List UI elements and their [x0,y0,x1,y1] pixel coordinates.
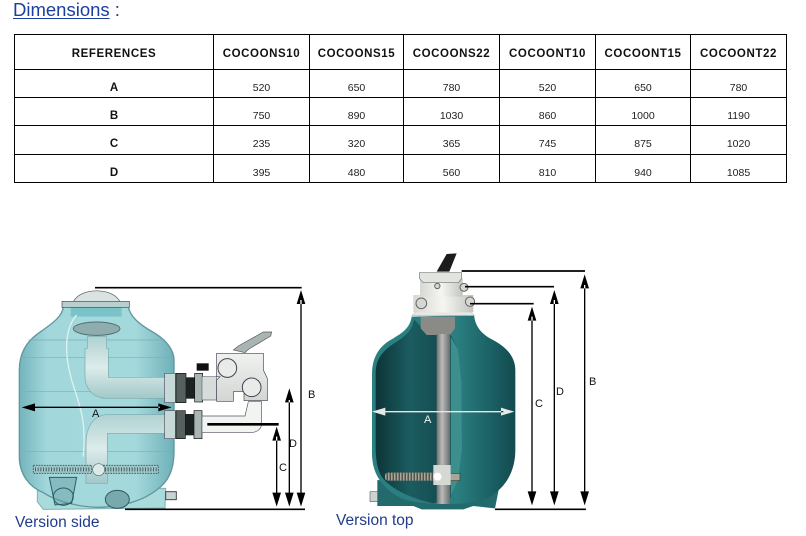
tank outer [372,315,515,504]
line top C [207,420,279,428]
drain outlet [105,490,129,508]
table header row: COCOONS15 [318,48,395,60]
label D top: D [556,386,564,398]
row C: 320 [348,138,365,150]
label C side: C [279,462,287,474]
row B: 1030 [440,110,463,122]
arrow C [528,307,536,505]
central pipe [437,334,450,504]
label C top: C [535,398,543,410]
diffuser [73,322,120,335]
row A [110,82,747,94]
row A: 780 [730,82,747,94]
arrow D [550,290,559,505]
valve flange [412,311,475,316]
valve handle [437,253,457,272]
line bottom [495,507,586,512]
row D: 940 [634,166,652,178]
lid flange [62,301,129,307]
table header row: COCOONT10 [509,48,586,60]
row A: 780 [443,82,460,94]
row D: 1085 [727,166,750,178]
table header row: COCOONT15 [605,48,681,60]
line bottom [125,507,305,512]
base feet [377,480,499,509]
row A: 520 [539,82,556,94]
row C: 365 [443,138,460,150]
row D: D [110,166,118,178]
row B: 860 [539,110,556,122]
side drain [370,492,378,502]
arrow D [285,388,294,507]
line D [465,284,554,289]
row C: 1020 [727,138,750,150]
valve upper body [420,278,463,297]
row C: 875 [634,138,652,150]
base [37,487,166,509]
valve connection pipe [202,377,217,400]
table header row: COCOONS22 [413,48,490,60]
valve lower body [413,295,473,312]
hose [67,315,84,457]
black plug [197,363,209,371]
upper collector pipe [85,337,165,398]
row D [110,166,750,178]
arrow A [372,408,514,416]
row D: 480 [348,166,365,178]
table header row: COCOONT22 [700,48,777,60]
valve ports [218,359,261,397]
row C: 235 [253,138,270,150]
row D: 560 [443,166,460,178]
pipe flanges [165,373,175,439]
unions [176,373,203,439]
caption: version top: Version top [336,512,414,529]
tank seams [20,340,173,452]
label B side: B [308,389,315,401]
row A: 650 [634,82,652,94]
interior light strip [450,335,462,497]
laterals [33,464,158,476]
line top B [95,285,302,290]
valve ports [416,283,475,309]
row B [110,110,750,122]
valve cap [419,273,462,283]
line B [462,268,585,273]
table header row: REFERENCES [72,48,156,60]
row D: 395 [253,166,270,178]
manifold collar [421,317,455,335]
label A side: A [92,408,100,420]
tank neck [71,307,122,317]
row B: 1000 [631,110,655,122]
arrow C [272,427,281,507]
label D side: D [289,438,297,450]
drain plug [166,492,176,500]
arrow B [297,290,305,507]
dome [73,291,121,303]
row B: 1190 [727,110,750,122]
tank body [19,306,174,507]
table header row [72,48,777,178]
row C: C [110,138,118,150]
drain sock [49,477,77,505]
table header row: COCOONS10 [223,48,300,60]
row B: 890 [348,110,365,122]
valve handle [233,332,272,353]
row B: 750 [253,110,270,122]
row A: A [110,82,118,94]
diagram: version top filter [370,253,589,509]
laterals [385,465,460,485]
row D: 810 [539,166,556,178]
return pipe [202,402,262,433]
row C: 745 [539,138,556,150]
lower collector pipe [86,415,165,483]
row B: B [110,110,118,122]
tank interior cutaway [376,319,462,503]
caption: version side: Version side [15,514,99,531]
row C [110,138,750,150]
row A: 650 [348,82,365,94]
arrow B [580,274,589,505]
arrow A [22,403,172,411]
line C [470,301,534,306]
dimensions table [14,34,787,183]
diagram: version side filter [19,288,305,509]
valve body [217,353,267,401]
label B top: B [589,376,596,388]
label A top: A [424,414,432,426]
row A: 520 [253,82,270,94]
